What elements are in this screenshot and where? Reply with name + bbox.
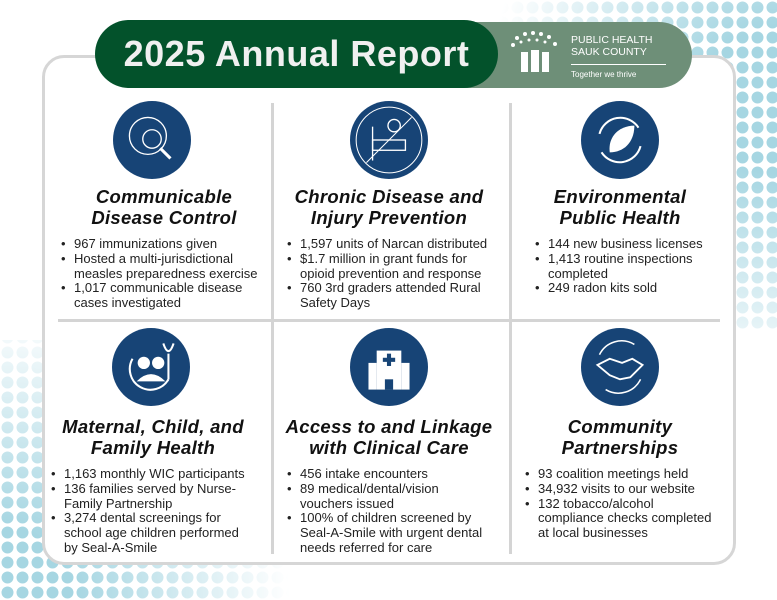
panel: communicable disease bbox=[62, 101, 258, 310]
bullets: vouchers issued bbox=[300, 496, 394, 511]
bullets: 89 medical/dental/vision bbox=[300, 481, 439, 496]
bullets: cases investigated bbox=[74, 295, 181, 310]
bullets: 456 intake encounters bbox=[300, 466, 428, 481]
logo banner bbox=[380, 22, 692, 88]
bullets: 132 tobacco/alcohol bbox=[538, 496, 654, 511]
panel: community partnerships bbox=[526, 328, 711, 540]
bullets bbox=[536, 236, 703, 295]
bullets: compliance checks completed bbox=[538, 510, 711, 525]
bullets: 34,932 visits to our website bbox=[538, 481, 695, 496]
panel: access to care bbox=[285, 328, 492, 555]
heading bbox=[562, 416, 678, 458]
logo text bbox=[571, 34, 666, 79]
bullets: 249 radon kits sold bbox=[548, 280, 657, 295]
title bbox=[95, 20, 498, 88]
heading: Communicable bbox=[96, 186, 232, 207]
bullets: 136 families served by Nurse- bbox=[64, 481, 236, 496]
icon: hospital building bbox=[350, 328, 428, 406]
heading: Disease Control bbox=[91, 207, 237, 228]
heading bbox=[62, 416, 244, 458]
heading: Injury Prevention bbox=[311, 207, 467, 228]
bullets: 144 new business licenses bbox=[548, 236, 703, 251]
heading: Public Health bbox=[559, 207, 681, 228]
bullets: 1,163 monthly WIC participants bbox=[64, 466, 245, 481]
bullets: Family Partnership bbox=[64, 496, 172, 511]
icon: petri dish bbox=[113, 101, 191, 179]
bullets: 1,017 communicable disease bbox=[74, 280, 242, 295]
bullets: Safety Days bbox=[300, 295, 370, 310]
heading: Partnerships bbox=[562, 437, 678, 458]
heading: Family Health bbox=[91, 437, 215, 458]
panel: environmental bbox=[536, 101, 703, 295]
bullets: 967 immunizations given bbox=[74, 236, 217, 251]
panel: maternal bbox=[52, 328, 245, 555]
icon: hospital bed bbox=[350, 101, 428, 179]
bullets bbox=[288, 236, 487, 310]
logo text: SAUK COUNTY Together we thrive bbox=[571, 46, 647, 79]
heading bbox=[554, 186, 686, 228]
bullets: Hosted a multi-jurisdictional bbox=[74, 251, 233, 266]
bullets: completed bbox=[548, 266, 608, 281]
heading: Environmental bbox=[554, 186, 686, 207]
title: 2025 Annual Report bbox=[124, 33, 469, 74]
heading: with Clinical Care bbox=[309, 437, 469, 458]
icon: family stethoscope bbox=[112, 328, 190, 406]
bullets: at local businesses bbox=[538, 525, 648, 540]
bullets bbox=[52, 466, 245, 555]
icon: leaf cycle bbox=[581, 101, 659, 179]
heading bbox=[295, 186, 484, 228]
bullets bbox=[288, 466, 482, 555]
bullets: $1.7 million in grant funds for bbox=[300, 251, 467, 266]
heading: Maternal, Child, and bbox=[62, 416, 244, 437]
bullets bbox=[526, 466, 711, 540]
main card bbox=[42, 55, 736, 565]
panel: chronic disease bbox=[288, 101, 487, 310]
bullets: 93 coalition meetings held bbox=[538, 466, 688, 481]
bullets: needs referred for care bbox=[300, 540, 432, 555]
bullets: 100% of children screened by bbox=[300, 510, 471, 525]
logo icon bbox=[511, 31, 557, 72]
bullets: 1,597 units of Narcan distributed bbox=[300, 236, 487, 251]
bullets: school age children performed bbox=[64, 525, 239, 540]
bullets: 3,274 dental screenings for bbox=[64, 510, 221, 525]
bullets: opioid prevention and response bbox=[300, 266, 481, 281]
bullets: 760 3rd graders attended Rural bbox=[300, 280, 481, 295]
heading: Community bbox=[568, 416, 672, 437]
icon: handshake bbox=[581, 328, 659, 406]
heading: Chronic Disease and bbox=[295, 186, 483, 207]
heading bbox=[285, 416, 492, 458]
bullets: 1,413 routine inspections bbox=[548, 251, 693, 266]
bullets: Seal-A-Smile with urgent dental bbox=[300, 525, 482, 540]
bullets: measles preparedness exercise bbox=[74, 266, 258, 281]
bullets bbox=[62, 236, 258, 310]
heading bbox=[91, 186, 237, 228]
bullets: by Seal-A-Smile bbox=[64, 540, 157, 555]
heading: Access to and Linkage bbox=[286, 416, 492, 437]
logo text: PUBLIC HEALTH bbox=[571, 34, 652, 46]
